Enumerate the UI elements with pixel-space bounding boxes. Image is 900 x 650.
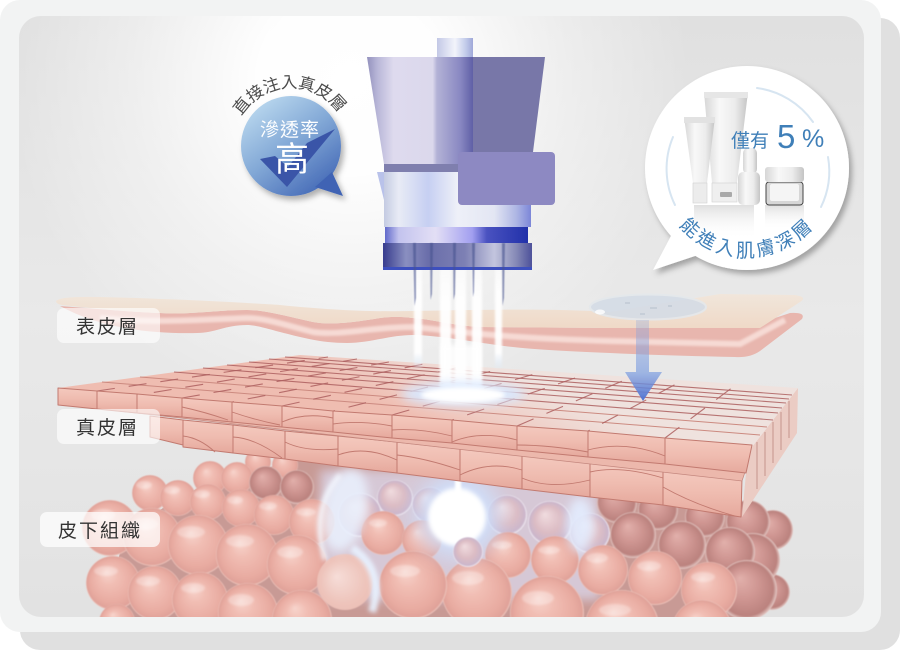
illustration: subcutaneous fat spheres xyxy=(82,455,794,617)
dermis upper front blocks xyxy=(58,388,752,473)
dropper bottle xyxy=(738,148,760,205)
dermis right side face xyxy=(742,388,798,517)
callout bubble xyxy=(241,96,343,196)
label: epidermis xyxy=(57,308,160,343)
device band xyxy=(385,227,528,243)
label: epidermis: 表皮層 xyxy=(76,316,139,338)
callout curved heading: 直接注入真皮層 xyxy=(232,75,348,116)
device side box xyxy=(458,152,555,205)
device top shaft xyxy=(437,38,473,58)
device: microneedle head xyxy=(367,38,555,306)
callout: cosmetic products only 5% xyxy=(645,66,855,277)
dermis middle membrane xyxy=(100,403,745,481)
product reflections xyxy=(694,205,804,239)
dermis top surface xyxy=(58,355,798,447)
label: dermis xyxy=(57,409,160,444)
large tube xyxy=(704,92,748,202)
callout value: 高 xyxy=(275,141,309,179)
microneedles xyxy=(413,243,505,306)
white speech bubble xyxy=(645,66,849,270)
label: subcutaneous tissue: 皮下組織 xyxy=(58,520,142,542)
text: enters deep skin: 能進入肌膚深層 xyxy=(678,218,812,259)
energy glow in subcutaneous tissue xyxy=(315,464,594,612)
small tube xyxy=(684,117,715,203)
text: only 5 percent: 僅有 xyxy=(731,130,769,152)
callout: high penetration xyxy=(232,75,348,204)
droplet on epidermis xyxy=(590,294,706,320)
decorative arcs xyxy=(667,88,829,207)
arrow: topical absorption downward xyxy=(625,320,662,401)
dermis layer xyxy=(58,355,798,517)
label: subcutaneous tissue xyxy=(40,512,160,547)
device base xyxy=(383,243,532,270)
text: only 5 percent: 5 xyxy=(777,118,795,155)
epidermis pink lower band xyxy=(60,306,803,357)
cream jar xyxy=(765,167,804,205)
device ring xyxy=(384,164,460,172)
device cylinder xyxy=(377,172,531,227)
injection light beams xyxy=(401,268,525,406)
epidermis pink highlight xyxy=(100,318,785,344)
text: only 5 percent: % xyxy=(802,125,824,153)
label: dermis: 真皮層 xyxy=(76,417,139,439)
callout label: 滲透率 xyxy=(260,119,320,141)
epidermis layer xyxy=(56,294,803,357)
dermis lower blocks xyxy=(150,416,742,517)
device cone xyxy=(367,57,545,164)
check mark xyxy=(260,129,335,187)
epidermis cream top band xyxy=(56,294,803,328)
text: only 5 percent xyxy=(731,118,824,155)
